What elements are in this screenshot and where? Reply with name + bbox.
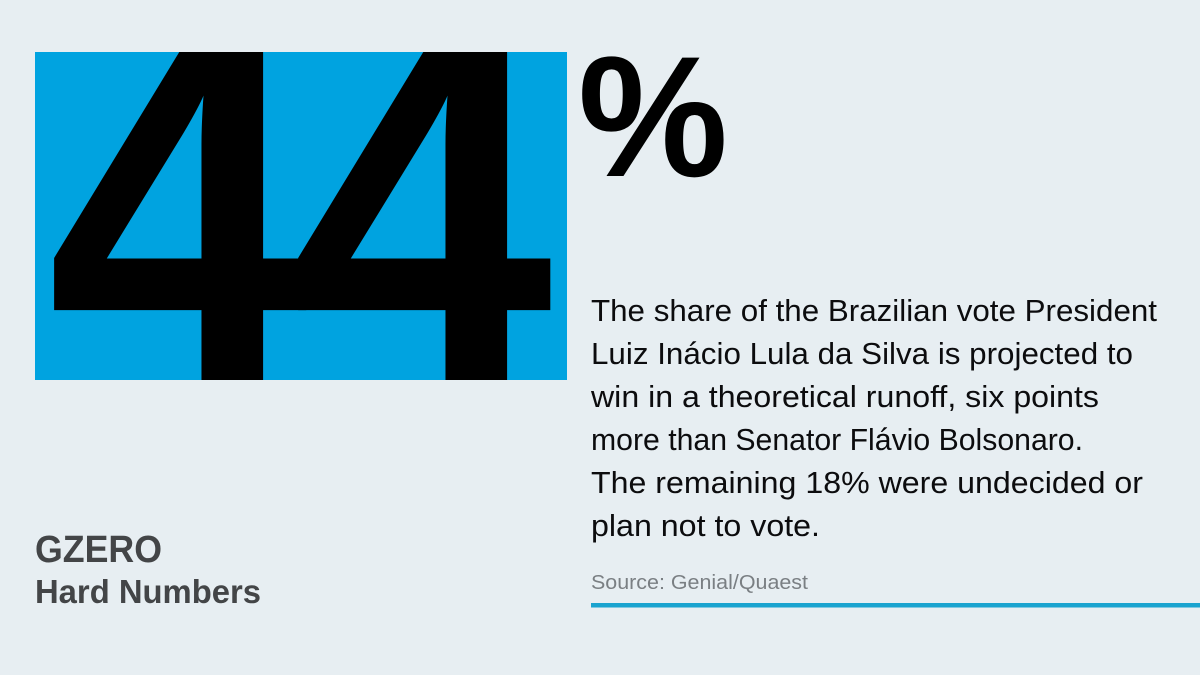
brand: GZERO Hard Numbers bbox=[35, 529, 261, 610]
infographic canvas bbox=[35, 52, 1200, 608]
brand: GZERO Hard Numbers: GZERO bbox=[35, 529, 162, 571]
description text bbox=[590, 293, 1157, 543]
brand: GZERO Hard Numbers: Hard Numbers bbox=[35, 573, 261, 610]
accent rule bbox=[591, 603, 1200, 608]
description text: more than Senator Flávio Bolsonaro. bbox=[591, 422, 1083, 457]
description text: The remaining 18% were undecided or bbox=[591, 465, 1143, 500]
percent sign: % bbox=[578, 21, 728, 213]
description text: Luiz Inácio Lula da Silva is projected to bbox=[591, 336, 1133, 371]
description text: The share of the Brazilian vote President bbox=[591, 293, 1157, 328]
source line: Source: Genial/Quaest bbox=[591, 572, 808, 594]
big number: 44 on blue panel bbox=[35, 52, 567, 380]
description text: win in a theoretical runoff, six points bbox=[590, 379, 1099, 414]
description text: plan not to vote. bbox=[591, 508, 820, 543]
